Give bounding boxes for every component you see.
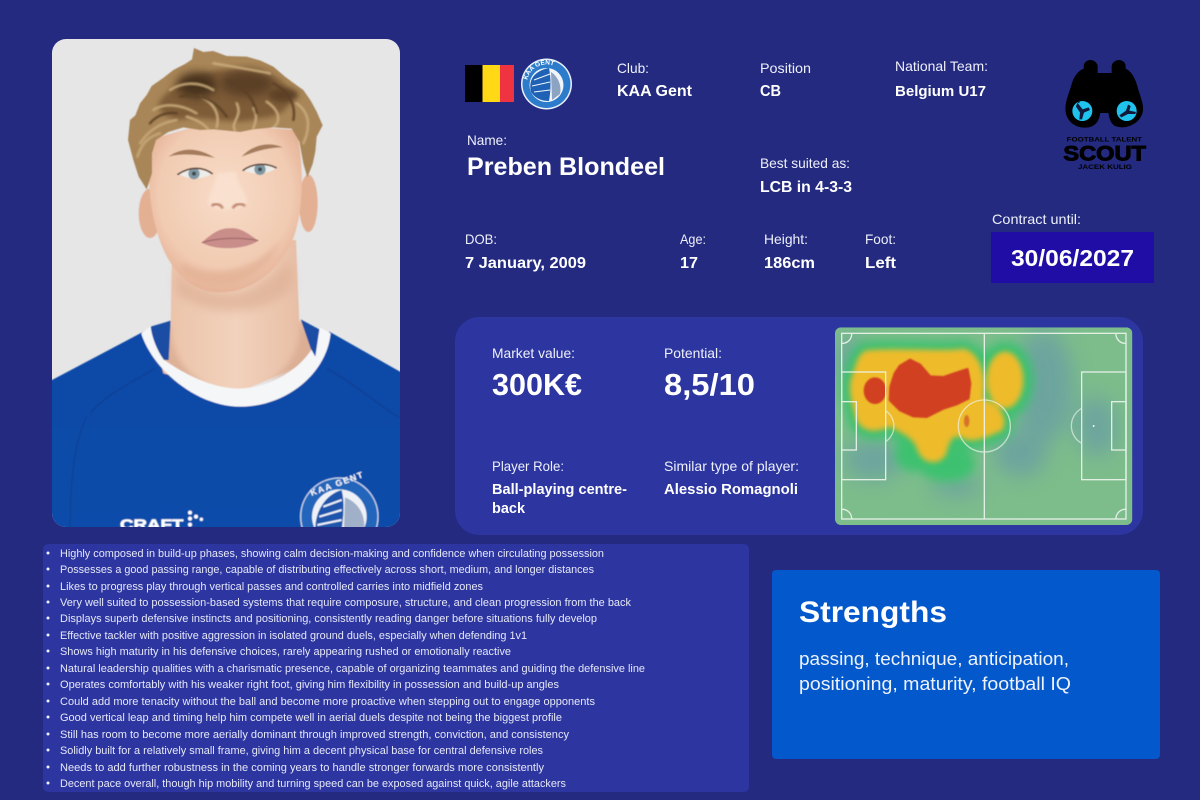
best suited as: LCB in 4-3-3 — [760, 179, 852, 196]
logo: Football Talent Scout: JACEK KULIG — [1078, 164, 1132, 171]
badge: KAA Gent crest — [521, 58, 572, 110]
market value: 300K€ — [492, 367, 582, 402]
foot: Left — [865, 255, 897, 272]
bullet list — [46, 548, 645, 790]
badge: KAA Gent crest: KAA GENT — [523, 60, 555, 80]
position: CB — [760, 83, 781, 100]
bullet list: Needs to add further robustness in the coming years to handle stronger forwards more consistently — [60, 762, 544, 774]
best suited as — [760, 155, 852, 196]
panel: scouting notes — [43, 544, 749, 792]
national team: Belgium U17 — [895, 83, 986, 100]
player photo: CRAFT — [120, 517, 183, 533]
player photo: KAA GENT — [309, 469, 365, 498]
logo: Football Talent Scout: FOOTBALL TALENT — [1067, 136, 1142, 143]
club: Club: — [617, 60, 649, 76]
heatmap — [835, 327, 1132, 525]
bullet list: Could add more tenacity without the ball and become more proactive when stepping out to engage opponents — [60, 696, 595, 708]
bullet list: Very well suited to possession-based systems that require composure, structure, and clean progression from the back — [60, 597, 631, 609]
logo: Football Talent Scout: SCOUT — [1063, 142, 1146, 166]
player photo — [52, 39, 400, 527]
contract until: Contract until: — [992, 211, 1081, 227]
height: 186cm — [764, 255, 815, 272]
strengths list: positioning, maturity, football IQ — [799, 674, 1071, 694]
market value — [492, 345, 582, 402]
flag: Belgium — [465, 65, 514, 102]
player role: Ball-playing centre- — [492, 481, 627, 498]
similar type of player: Alessio Romagnoli — [664, 481, 798, 498]
bullet list: Decent pace overall, though hip mobility and turning speed can be exposed against quick, agile attackers — [60, 778, 566, 790]
bullet list: Likes to progress play through vertical passes and controlled carries into midfield zones — [60, 581, 483, 593]
bullet list: Still has room to become more aerially dominant through improved strength, conviction, and consistency — [60, 729, 569, 741]
contract until: 30/06/2027 — [1011, 245, 1134, 271]
bullet list: Highly composed in build-up phases, showing calm decision-making and confidence when circulating possession — [60, 548, 604, 560]
contract until — [991, 211, 1154, 283]
name: Name: — [467, 132, 507, 148]
player role — [492, 458, 627, 517]
bullet list: Shows high maturity in his defensive choices, rarely appearing rushed or emotionally reactive — [60, 646, 511, 658]
player role: Player Role: — [492, 458, 564, 474]
strengths list — [799, 649, 1071, 694]
bullet list: Operates comfortably with his weaker right foot, giving him flexibility in possession and build-up angles — [60, 679, 559, 691]
position: Position — [760, 60, 811, 76]
national team: National Team: — [895, 58, 988, 74]
market value: Market value: — [492, 345, 575, 361]
panel: market stats — [455, 317, 1143, 535]
player role: back — [492, 500, 526, 517]
age: Age: — [680, 231, 706, 247]
strengths list: passing, technique, anticipation, — [799, 649, 1069, 669]
bullet list: Displays superb defensive instincts and positioning, consistently reading danger before situations fully develop — [60, 613, 597, 625]
bullet list: Effective tackler with positive aggression in isolated ground duels, especially when defending 1v1 — [60, 630, 527, 642]
best suited as: Best suited as: — [760, 155, 850, 171]
potential — [664, 345, 755, 402]
date of birth: DOB: — [465, 231, 497, 247]
national team — [895, 58, 988, 100]
bullet list: Natural leadership qualities with a charismatic presence, capable of organizing teammates and guiding the defensive line — [60, 663, 645, 675]
date of birth: 7 January, 2009 — [465, 255, 586, 272]
position — [760, 60, 811, 100]
height: Height: — [764, 231, 808, 247]
name — [467, 132, 665, 181]
bullet list: Good vertical leap and timing help him compete well in aerial duels despite not being the biggest profile — [60, 712, 562, 724]
bullet list: Solidly built for a relatively small frame, giving him a decent physical base for central defensive roles — [60, 745, 543, 757]
date of birth — [465, 231, 586, 272]
similar type of player — [664, 458, 799, 498]
name: Preben Blondeel — [467, 153, 665, 181]
similar type of player: Similar type of player: — [664, 458, 799, 474]
age — [680, 231, 706, 272]
potential: 8,5/10 — [664, 367, 755, 402]
height — [764, 231, 815, 272]
club — [617, 60, 693, 100]
foot: Foot: — [865, 231, 896, 247]
panel: strengths — [772, 570, 1160, 759]
logo: Football Talent Scout — [1063, 61, 1146, 171]
age: 17 — [680, 255, 698, 272]
potential: Potential: — [664, 345, 722, 361]
bullet list: Possesses a good passing range, capable of distributing effectively across short, medium, and longer distances — [60, 564, 594, 576]
club: KAA Gent — [617, 83, 693, 100]
strengths heading: Strengths — [799, 596, 947, 629]
foot — [865, 231, 897, 272]
